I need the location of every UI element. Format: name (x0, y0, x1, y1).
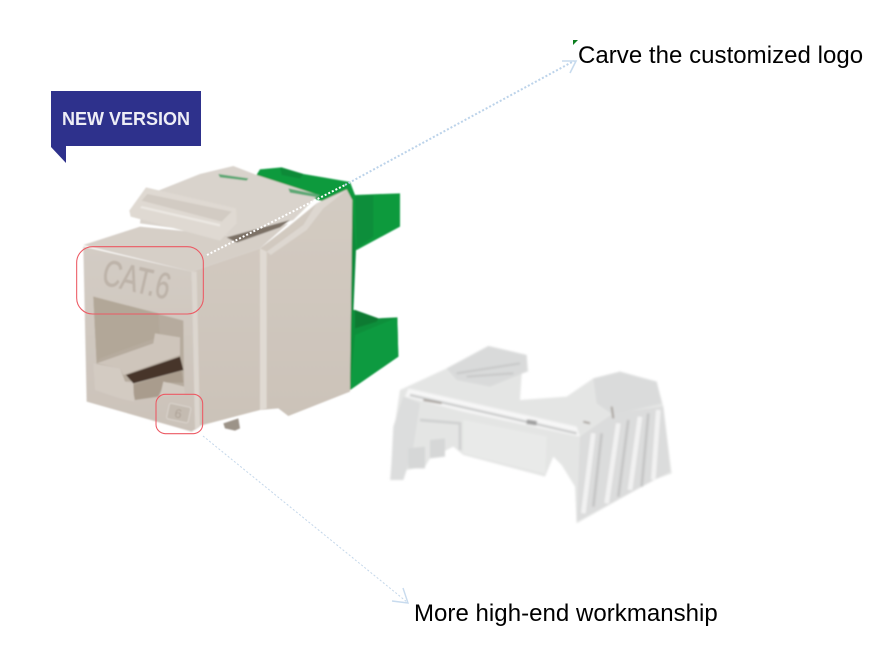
icon: new version badge (51, 91, 201, 163)
CAT.6 moulded text: CAT.6 (99, 251, 175, 307)
arrow: to more high-end workmanship (203, 436, 408, 603)
jack top surface (83, 223, 288, 272)
jack side body (192, 189, 352, 427)
ridge (260, 248, 267, 410)
moulded 6 tag: 6 (173, 406, 183, 422)
bottom pin (223, 418, 240, 431)
badge text: NEW VERSION (62, 109, 190, 129)
arrow: to carve the customized logo (207, 61, 576, 255)
green rear lower (350, 310, 398, 390)
product photo: keystone jack (77, 166, 400, 434)
green corner mark (573, 40, 578, 45)
highlight box: CAT.6 marking (77, 247, 203, 314)
label: carve the customized logo: Carve the customized logo (578, 42, 863, 69)
green rear upper (253, 167, 400, 250)
front face (83, 247, 197, 432)
highlight box: category tag (156, 394, 203, 434)
latch plate (140, 166, 318, 237)
moulded 6 tag (166, 403, 191, 423)
product photo: clear cap (390, 346, 672, 523)
latch tab (129, 187, 237, 241)
port opening (93, 297, 184, 395)
latch shadow (227, 220, 290, 243)
label: more high-end workmanship: More high-end workmanship (414, 600, 718, 627)
